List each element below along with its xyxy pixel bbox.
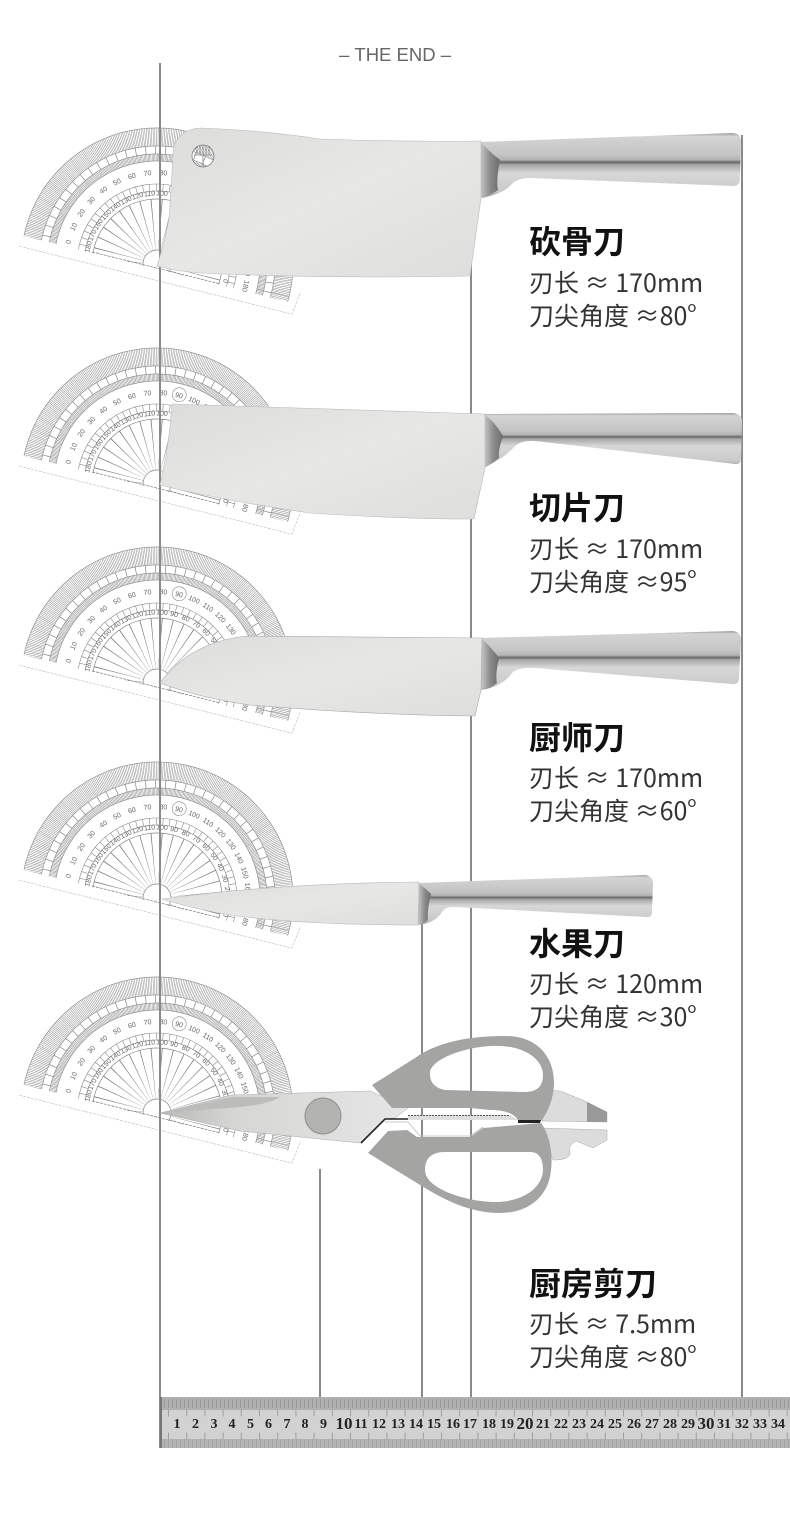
ruler numbers: 15 <box>427 1417 441 1432</box>
ruler numbers: 27 <box>645 1417 659 1432</box>
ruler numbers: 11 <box>354 1417 368 1432</box>
label: kitchen scissors: o <box>687 1337 696 1358</box>
ruler numbers: 8 <box>302 1417 308 1432</box>
label: slicing knife: 刀尖角度 ≈95 <box>529 563 687 599</box>
ruler <box>160 1397 790 1448</box>
label: chef knife <box>529 713 703 828</box>
label: slicing knife: o <box>687 562 696 583</box>
label: fruit knife: 水果刀 <box>529 919 625 965</box>
protractor 4 <box>0 733 332 1065</box>
label: cleaver: 刀尖角度 ≈80 <box>529 297 687 333</box>
ruler numbers: 7 <box>284 1417 290 1432</box>
protractor 5 <box>0 948 332 1280</box>
label: kitchen scissors: 厨房剪刀 <box>529 1259 657 1305</box>
ruler numbers: 33 <box>753 1417 767 1432</box>
ruler numbers: 10 <box>336 1414 352 1433</box>
kitchen scissors <box>160 1036 607 1213</box>
ruler numbers <box>174 1414 785 1433</box>
label: fruit knife <box>529 919 703 1034</box>
ruler numbers: 13 <box>391 1417 405 1432</box>
ruler numbers: 9 <box>320 1417 327 1432</box>
ruler numbers: 28 <box>663 1417 677 1432</box>
protractor 1 <box>0 99 332 431</box>
ruler numbers: 3 <box>210 1417 218 1432</box>
ruler numbers: 26 <box>627 1417 641 1432</box>
ruler numbers: 22 <box>554 1417 568 1432</box>
label: kitchen scissors <box>529 1259 696 1374</box>
label: slicing knife <box>529 483 703 599</box>
protractor 3 <box>0 518 332 850</box>
ruler numbers: 12 <box>372 1417 386 1432</box>
label: fruit knife: o <box>687 997 696 1018</box>
label: slicing knife: 刃长 ≈ 170mm <box>529 530 703 566</box>
label: chef knife: 厨师刀 <box>529 713 625 759</box>
knife 3: chef knife <box>160 631 741 716</box>
knife 2: slicing knife <box>160 404 742 519</box>
label: cleaver <box>529 217 703 333</box>
ruler numbers: 29 <box>681 1417 695 1432</box>
label: chef knife: o <box>687 791 696 812</box>
ruler numbers: 18 <box>482 1417 496 1432</box>
ruler numbers: 17 <box>463 1417 477 1432</box>
knife 1: cleaver <box>157 128 741 277</box>
protractor 2 <box>0 319 332 651</box>
measure lines <box>160 63 742 1448</box>
title: – THE END – <box>339 44 452 65</box>
ruler numbers: 25 <box>608 1417 622 1432</box>
label: chef knife: 刃长 ≈ 170mm <box>529 759 703 795</box>
ruler numbers: 31 <box>717 1417 731 1432</box>
ruler numbers: 34 <box>771 1417 785 1432</box>
ruler numbers: 4 <box>228 1417 236 1432</box>
ruler numbers: 19 <box>500 1417 514 1432</box>
knife 4: fruit knife <box>162 875 653 925</box>
label: slicing knife: 切片刀 <box>529 483 625 529</box>
ruler numbers: 32 <box>735 1417 749 1432</box>
label: cleaver: o <box>687 296 696 317</box>
ruler numbers: 2 <box>192 1417 199 1432</box>
label: cleaver: 刃长 ≈ 170mm <box>529 264 703 300</box>
ruler numbers: 1 <box>174 1417 180 1432</box>
ruler numbers: 14 <box>409 1417 423 1432</box>
ruler numbers: 21 <box>536 1417 550 1432</box>
ruler numbers: 24 <box>590 1417 604 1432</box>
label: cleaver: 砍骨刀 <box>529 217 625 263</box>
ruler numbers: 20 <box>516 1414 534 1433</box>
ruler numbers: 16 <box>446 1417 460 1432</box>
ruler numbers: 30 <box>698 1414 714 1433</box>
label: kitchen scissors: 刀尖角度 ≈80 <box>529 1338 687 1374</box>
label: chef knife: 刀尖角度 ≈60 <box>529 792 687 828</box>
label: fruit knife: 刀尖角度 ≈30 <box>529 998 687 1034</box>
ruler numbers: 6 <box>265 1417 272 1432</box>
label: fruit knife: 刃长 ≈ 120mm <box>529 965 703 1001</box>
ruler numbers: 5 <box>247 1417 254 1432</box>
ruler numbers: 23 <box>572 1417 586 1432</box>
label: kitchen scissors: 刃长 ≈ 7.5mm <box>529 1305 696 1341</box>
